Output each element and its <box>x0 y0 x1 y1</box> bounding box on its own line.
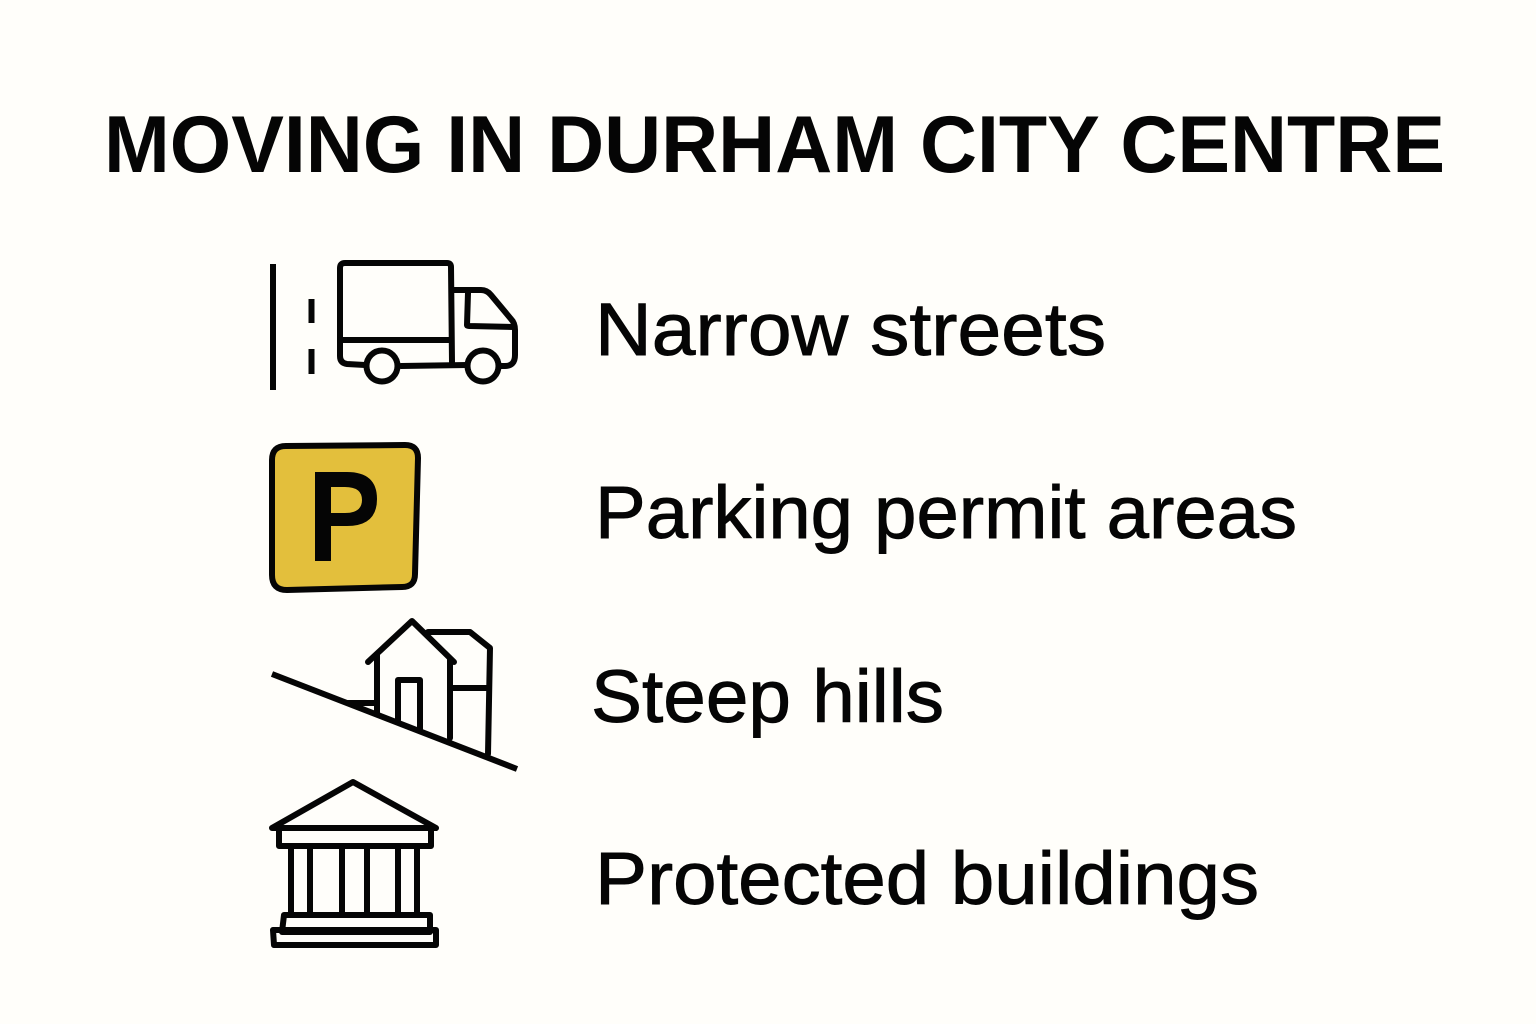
icon: house on steep hill <box>272 621 517 769</box>
label: narrow streets: Narrow streets <box>595 288 1106 371</box>
label: parking sign text: Parking permit areas <box>595 471 1297 554</box>
icon: parking sign <box>272 445 418 590</box>
label: protected buildings: Protected buildings <box>595 837 1259 920</box>
label: steep hills: Steep hills <box>591 655 944 738</box>
icon: protected building <box>272 782 436 945</box>
title: MOVING IN DURHAM CITY CENTRE <box>104 100 1445 190</box>
icon: truck on narrow street <box>273 263 515 390</box>
